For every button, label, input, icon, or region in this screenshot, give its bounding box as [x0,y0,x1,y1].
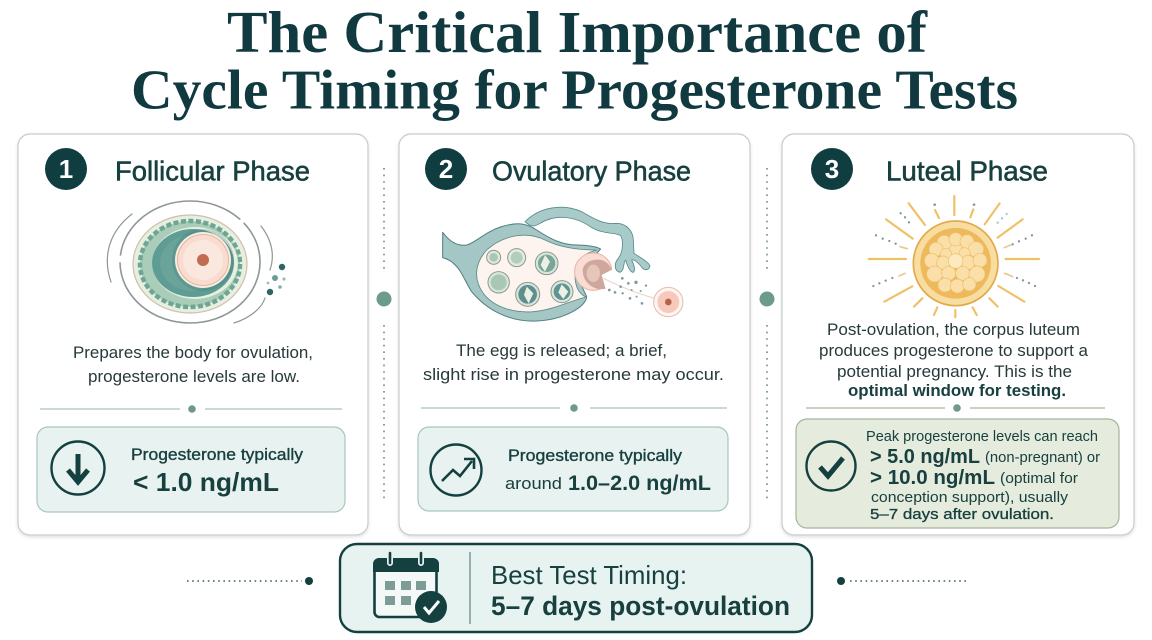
description: potential pregnancy. This is the [837,362,1072,381]
description: Post-ovulation, the corpus luteum [827,320,1080,339]
value text: conception support), usually [871,489,1069,506]
value text: (non-pregnant) or [985,450,1100,466]
icon: ovary releasing egg [443,207,683,321]
value text: around [505,475,562,493]
value text [505,447,711,495]
callout: progesterone low [37,427,345,512]
step number 3 [811,148,853,190]
connector: left of best timing [187,577,313,585]
timing text: 5–7 days post-ovulation [491,591,790,621]
title [131,0,1018,122]
description [819,320,1089,400]
icon: rising trend [430,444,482,496]
value text: Progesterone typically [508,447,683,465]
panel: best test timing [340,544,812,632]
value text: Peak progesterone levels can reach [866,428,1098,445]
heading: follicular phase: Follicular Phase [115,156,310,186]
value text: Progesterone typically [131,446,304,464]
value text: 5–7 days after ovulation. [870,506,1054,523]
connector: ovulatory to luteal [760,168,774,500]
callout: progesterone slight rise [418,427,728,511]
description [423,341,724,384]
heading: luteal phase: Luteal Phase [886,156,1048,186]
step number 2: 2 [439,154,453,184]
value text: > 5.0 ng/mL [870,446,980,468]
title: Cycle Timing for Progesterone Tests [131,60,1018,122]
panel: follicular phase [18,134,368,535]
timing text [491,560,790,621]
description: optimal window for testing. [848,381,1066,400]
description [73,343,313,386]
panel: luteal phase [782,134,1134,535]
panel: ovulatory phase [399,134,750,535]
step number 2 [425,148,467,190]
connector: follicular to ovulatory [376,168,392,500]
value text: (optimal for [1000,470,1078,487]
step number 1: 1 [59,154,73,184]
description: produces progesterone to support a [819,341,1089,360]
icon: ovarian follicle [107,201,286,323]
value text: > 10.0 ng/mL [870,467,995,489]
connector: right of best timing [837,577,966,585]
value text: 1.0–2.0 ng/mL [568,472,711,495]
icon: corpus luteum sun [869,196,1039,317]
timing text: Best Test Timing: [491,560,687,590]
icon: calendar with check [373,553,447,623]
description: progesterone levels are low. [88,367,300,386]
description: slight rise in progesterone may occur. [423,365,724,384]
icon: down arrow [52,442,104,494]
value text [131,446,304,497]
icon: check mark [806,442,856,490]
value text: < 1.0 ng/mL [133,467,279,497]
step number 3: 3 [825,154,839,184]
title: The Critical Importance of [227,0,928,65]
description: The egg is released; a brief, [456,341,667,360]
callout: peak progesterone [796,419,1119,528]
heading: ovulatory phase: Ovulatory Phase [492,156,691,186]
value text [866,428,1100,523]
step number 1 [45,148,87,190]
description: Prepares the body for ovulation, [73,343,313,362]
